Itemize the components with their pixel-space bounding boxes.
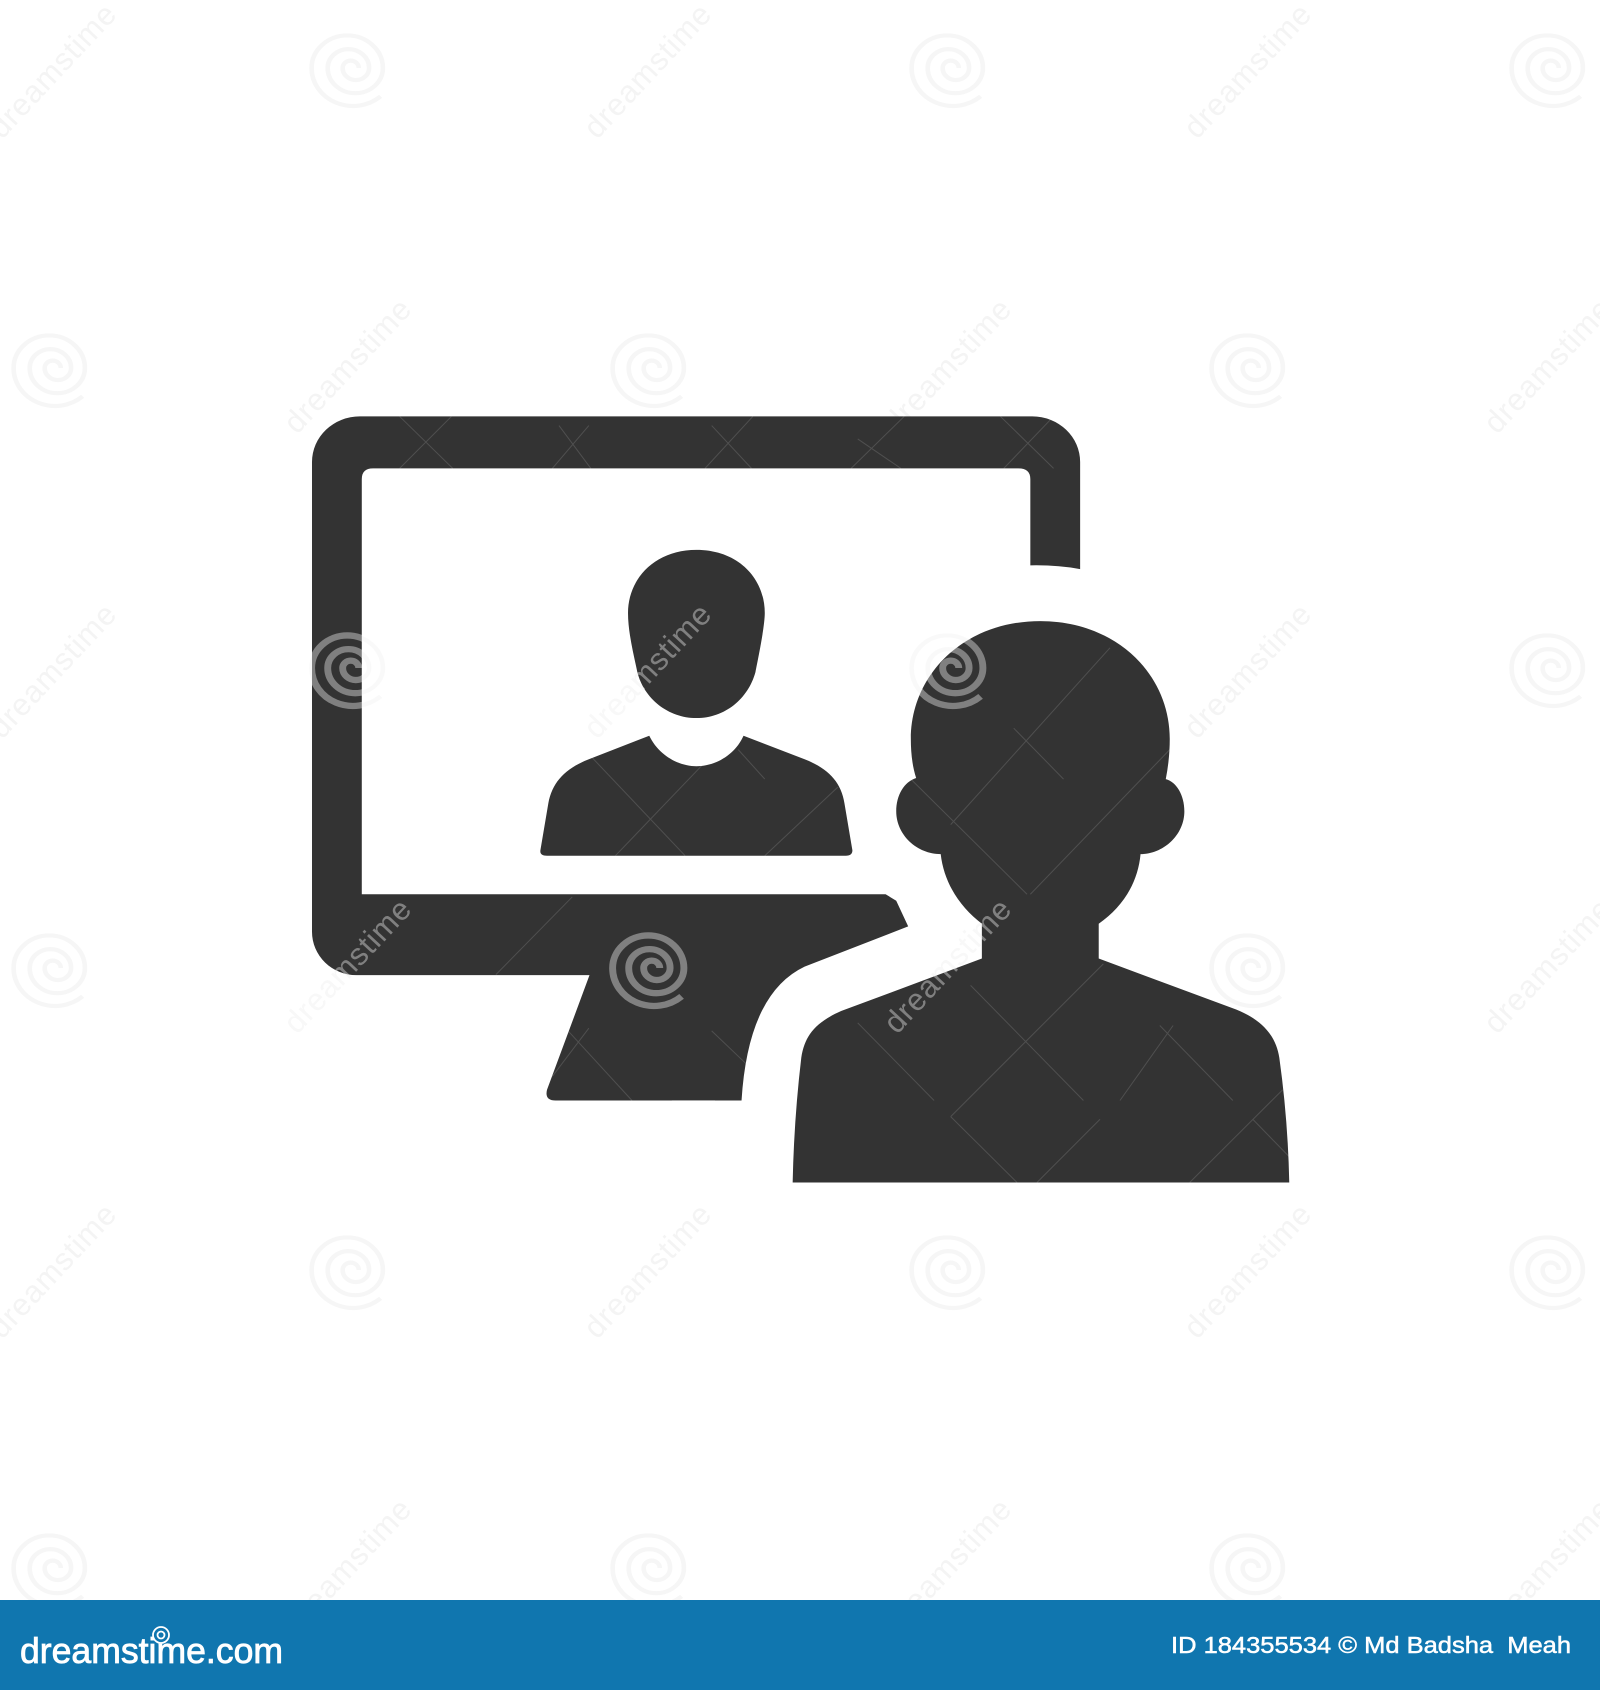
watermark overlay on dark icon areas: dreamstime: [577, 597, 718, 745]
icon: large person in foreground: [793, 621, 1289, 1182]
watermark pattern on white background: dreamstime: [877, 892, 1018, 1040]
watermark pattern on white background: dreamstime: [577, 597, 718, 745]
footer band: [0, 1600, 1600, 1690]
watermark pattern on white background: dreamstime: [277, 1492, 418, 1640]
watermark pattern on white background: dreamstime: [1177, 0, 1318, 145]
footer credit text: ID 184355534 © Md Badsha Meah: [1171, 1632, 1571, 1658]
watermark overlay on dark icon areas: dreamstime: [877, 892, 1018, 1040]
icon: monitor with stand: [312, 416, 1080, 1101]
watermark pattern on white background: dreamstime: [1177, 1197, 1318, 1345]
footer logo: dreamstime.com: dreamstime.com: [20, 1630, 283, 1671]
watermark pattern on white background: dreamstime: [277, 292, 418, 440]
watermark pattern on white background: dreamstime: [577, 1197, 718, 1345]
watermark pattern on white background: dreamstime: [277, 892, 418, 1040]
watermark pattern on white background: dreamstime: [1177, 597, 1318, 745]
watermark pattern on white background: dreamstime: [877, 292, 1018, 440]
watermark pattern on white background: dreamstime: [877, 1492, 1018, 1640]
watermark overlay on dark icon areas: dreamstime: [277, 892, 418, 1040]
icon: video call: [312, 416, 1289, 1182]
icon: small person on screen: [540, 550, 852, 856]
watermark pattern on white background: dreamstime: [577, 0, 718, 145]
logo spiral mark: [153, 1627, 169, 1643]
watermark overlay on dark icon areas: [277, 597, 1018, 1040]
